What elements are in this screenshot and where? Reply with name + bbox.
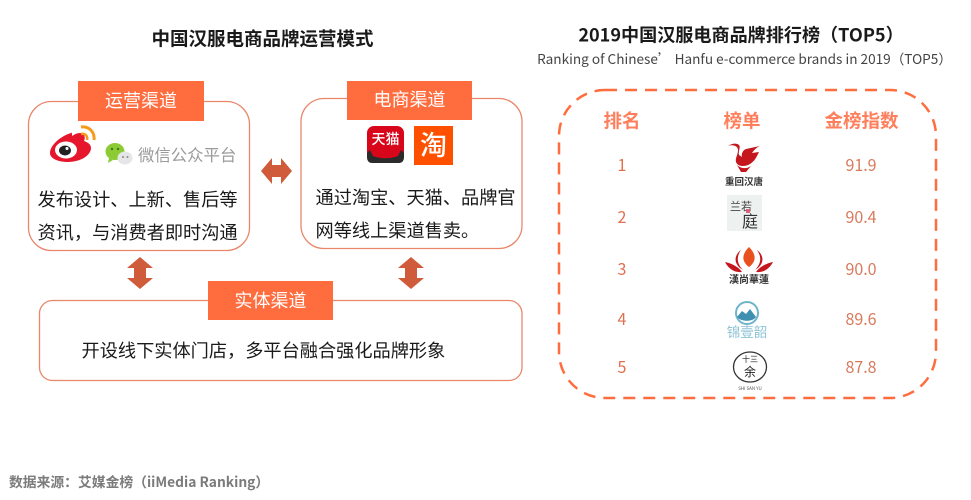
source note: 数据来源：艾媒金榜（iiMedia Ranking） bbox=[9, 471, 269, 491]
panel: ranking table bbox=[559, 90, 936, 398]
logo: brand 5: 余 bbox=[744, 363, 756, 380]
table header: 排名 bbox=[603, 108, 641, 134]
logo: brand 3: 漢尚華蓮 bbox=[729, 271, 769, 286]
label: physical channel: 实体渠道 bbox=[234, 287, 306, 313]
label: operations channel: 运营渠道 bbox=[105, 87, 177, 113]
text: e-commerce description bbox=[316, 184, 516, 243]
logo: brand 3 bbox=[725, 247, 773, 286]
logo: brand 1 bbox=[725, 144, 763, 188]
rank numbers bbox=[618, 152, 627, 378]
panel: operations channel bbox=[28, 81, 250, 250]
logo: brand 4: 锦壹韶 bbox=[727, 321, 767, 341]
logo: brand 2: 兰若 bbox=[730, 198, 752, 214]
table header: 金榜指数 bbox=[824, 108, 899, 134]
label: physical channel bbox=[208, 281, 333, 320]
index values: 91.9 bbox=[845, 152, 877, 176]
rank numbers: 1 bbox=[618, 152, 626, 176]
icon: taobao bbox=[414, 124, 453, 165]
icon: tmall: 天猫 bbox=[372, 129, 400, 149]
icon: taobao: 淘 bbox=[420, 124, 447, 163]
logo: brand 5: 十三 bbox=[742, 354, 758, 365]
subtitle: ranking: Ranking of Chinese’ Hanfu e-commerce brands in 2019（TOP5） bbox=[537, 48, 952, 68]
logo: brand 2: 庭 bbox=[742, 208, 758, 232]
logo: brand 5: SHI SAN YU bbox=[738, 386, 762, 392]
logo: brand 4 bbox=[727, 302, 767, 341]
text: operations description bbox=[38, 186, 238, 245]
index values: 90.0 bbox=[845, 256, 877, 280]
title: operating model: 中国汉服电商品牌运营模式 bbox=[151, 26, 374, 52]
text: operations description: 资讯，与消费者即时沟通 bbox=[38, 219, 238, 245]
label: e-commerce channel: 电商渠道 bbox=[374, 86, 446, 112]
icon: weibo bbox=[50, 127, 94, 162]
title: ranking: 2019中国汉服电商品牌排行榜（TOP5） bbox=[578, 22, 904, 48]
rank numbers: 3 bbox=[618, 256, 626, 280]
rank numbers: 4 bbox=[618, 306, 627, 330]
index values bbox=[845, 152, 877, 378]
icon: tmall bbox=[367, 126, 404, 163]
text: physical description: 开设线下实体门店，多平台融合强化品牌形象 bbox=[82, 337, 445, 363]
table header bbox=[603, 108, 899, 134]
panel: physical channel bbox=[40, 281, 522, 380]
arrow: between operations and physical bbox=[127, 257, 153, 289]
text: e-commerce description: 网等线上渠道售卖。 bbox=[316, 217, 479, 243]
panel: e-commerce channel bbox=[301, 81, 522, 248]
arrow: between e-commerce and physical bbox=[398, 257, 424, 289]
text: e-commerce description: 通过淘宝、天猫、品牌官 bbox=[316, 184, 516, 210]
rank numbers: 5 bbox=[618, 354, 627, 378]
index values: 90.4 bbox=[845, 204, 877, 228]
index values: 87.8 bbox=[845, 354, 877, 378]
icon: wechat official accounts: 微信公众平台 bbox=[138, 142, 236, 166]
logo: brand 5 bbox=[734, 352, 766, 392]
logo: brand 1: 重回汉唐 bbox=[725, 174, 763, 188]
text: operations description: 发布设计、上新、售后等 bbox=[38, 186, 238, 212]
logo: brand 2 bbox=[727, 195, 762, 232]
table header: 榜单 bbox=[723, 108, 761, 134]
arrow: between operations and e-commerce bbox=[261, 158, 292, 184]
label: operations channel bbox=[78, 81, 204, 121]
index values: 89.6 bbox=[845, 306, 877, 330]
label: e-commerce channel bbox=[347, 81, 472, 120]
rank numbers: 2 bbox=[618, 204, 627, 228]
